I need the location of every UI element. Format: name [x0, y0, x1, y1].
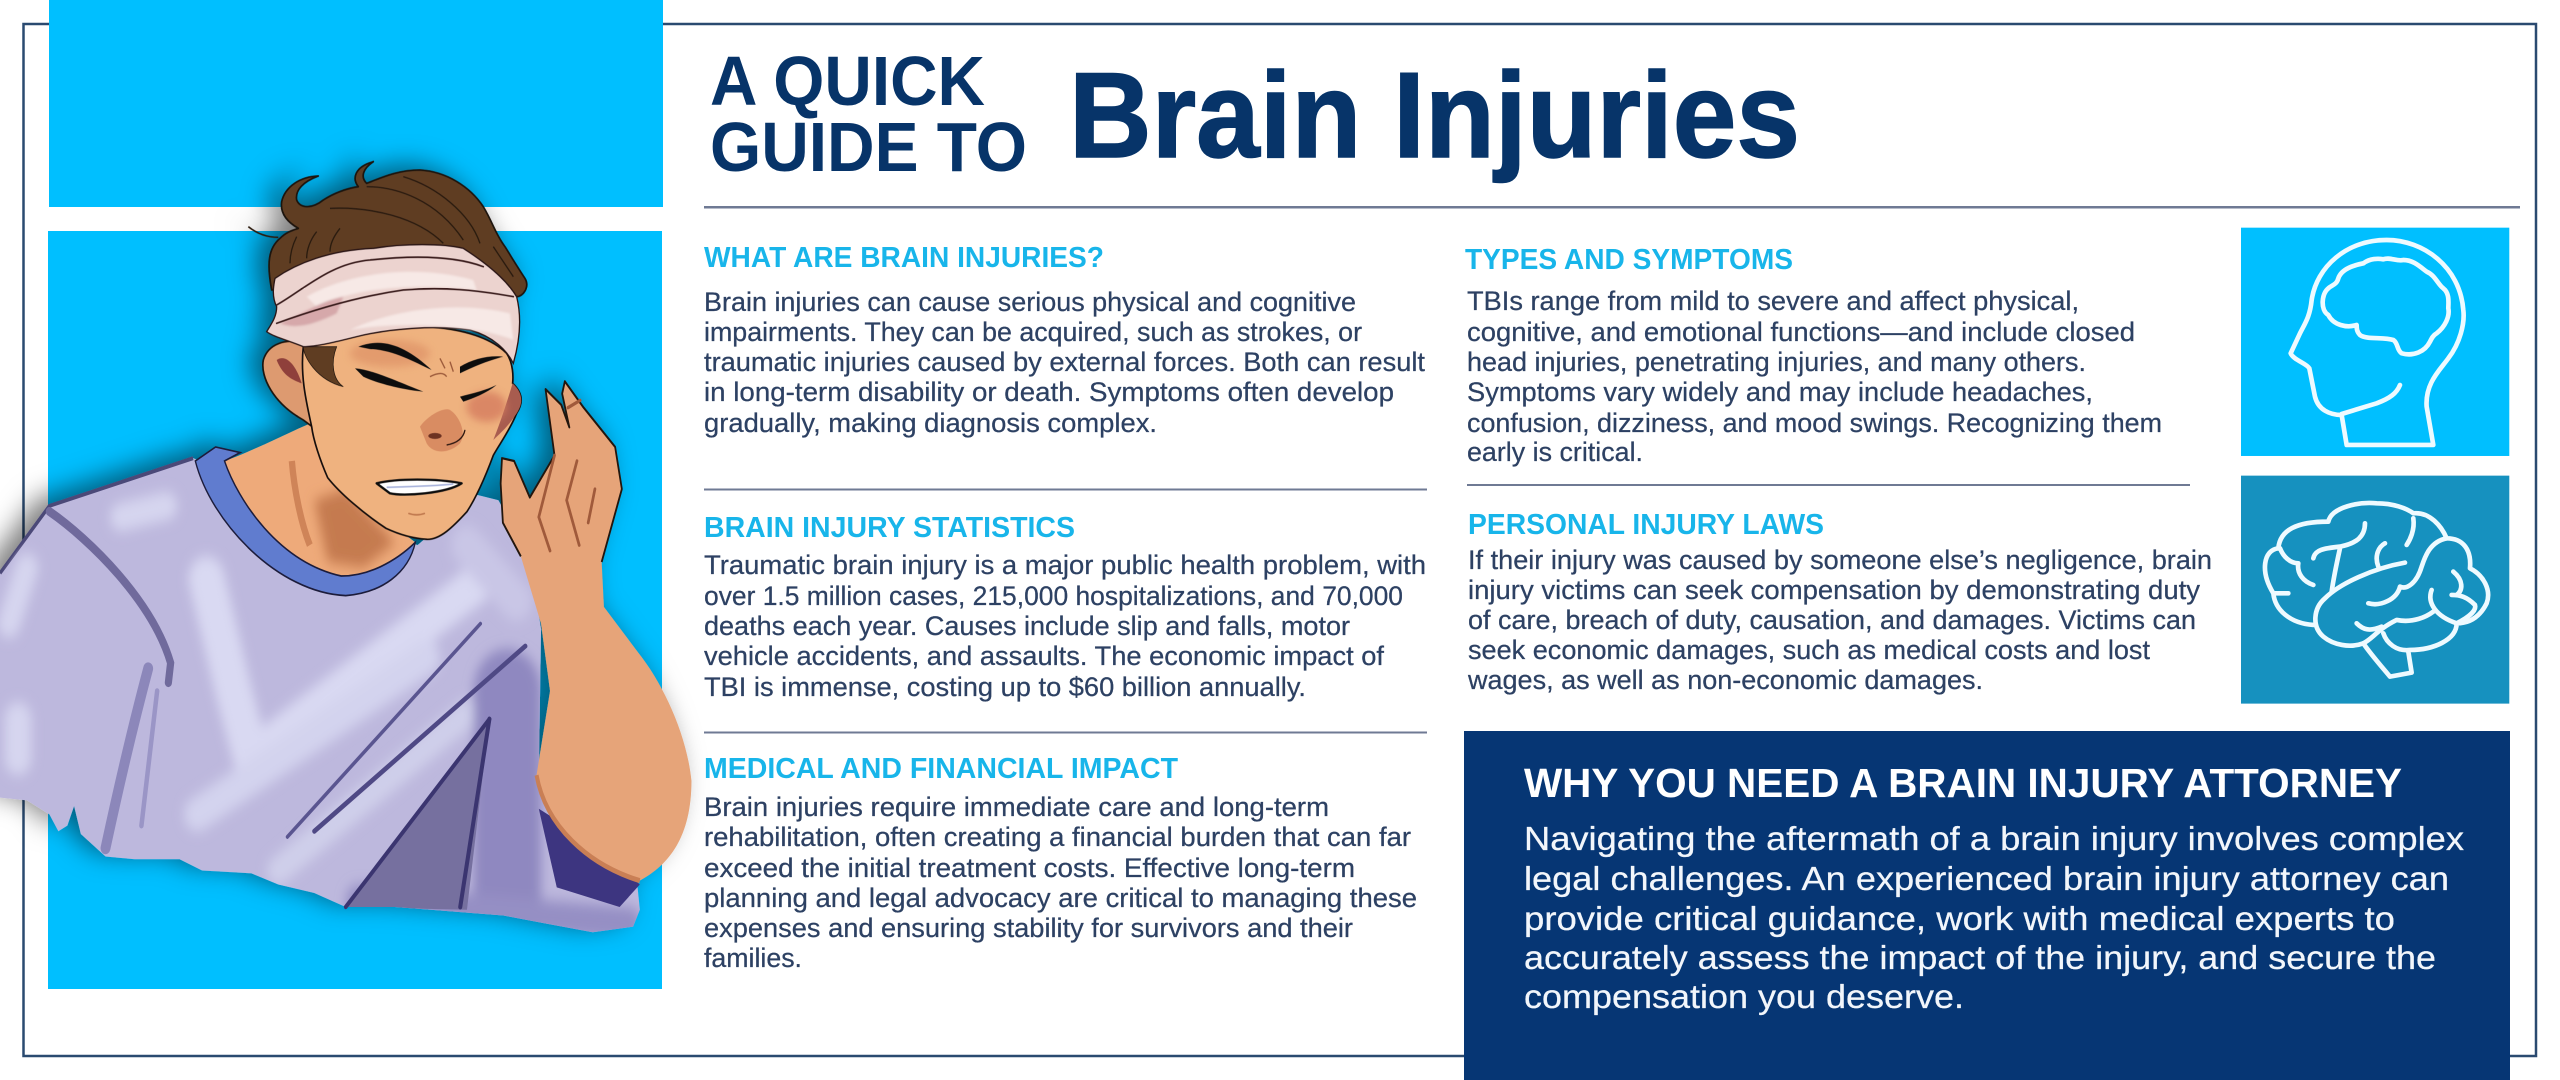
callout: why you need a brain injury attorney: provide critical guidance, work with medical experts to [1524, 901, 2395, 938]
section: personal injury laws: injury victims can seek compensation by demonstrating duty [1468, 575, 2201, 605]
icon: brain [2241, 476, 2509, 704]
bandage [267, 245, 520, 363]
callout: why you need a brain injury attorney: legal challenges. An experienced brain injury attorney can [1524, 861, 2449, 898]
ear [263, 341, 330, 430]
section: brain injury statistics: BRAIN INJURY STATISTICS [704, 512, 1075, 544]
illustration: injured man with head bandage [0, 162, 691, 932]
section: medical and financial impact: families. [704, 943, 802, 973]
section: types and symptoms: TBIs range from mild to severe and affect physical, [1467, 286, 2079, 316]
section: personal injury laws: of care, breach of duty, causation, and damages. Victims can [1468, 605, 2196, 635]
section: brain injury statistics: TBI is immense, costing up to $60 billion annually. [704, 672, 1306, 702]
section: what are brain injuries: WHAT ARE BRAIN INJURIES? [704, 242, 1104, 274]
title: brain injuries: Brain Injuries [1069, 47, 1800, 183]
lower blue panel [48, 231, 662, 989]
section: personal injury laws: If their injury was caused by someone else’s negligence, brain [1468, 545, 2212, 575]
section: types and symptoms: cognitive, and emotional functions—and include closed [1467, 317, 2135, 347]
man's shirt and arm [0, 381, 691, 932]
title: a quick guide to: GUIDE TO [710, 108, 1027, 186]
callout: why you need a brain injury attorney [1464, 731, 2510, 1080]
section: medical and financial impact [704, 753, 1417, 973]
callout: why you need a brain injury attorney: Navigating the aftermath of a brain injury involves complex [1524, 821, 2464, 858]
section: medical and financial impact: expenses and ensuring stability for survivors and their [704, 913, 1353, 943]
section: types and symptoms: early is critical. [1467, 437, 1643, 467]
callout: why you need a brain injury attorney: compensation you deserve. [1524, 979, 1964, 1016]
section: medical and financial impact: rehabilitation, often creating a financial burden that can far [704, 822, 1411, 852]
section: personal injury laws: PERSONAL INJURY LAWS [1468, 509, 1824, 541]
callout: why you need a brain injury attorney: accurately assess the impact of the injury, and secure the [1524, 940, 2436, 977]
arm and hand [539, 809, 640, 907]
section: medical and financial impact: planning and legal advocacy are critical to managing these [704, 883, 1417, 913]
title: a quick guide to [710, 42, 1027, 186]
icon: head with brain [2241, 228, 2509, 456]
face features [355, 343, 503, 402]
neck [224, 422, 415, 576]
section: what are brain injuries: Brain injuries can cause serious physical and cognitive [704, 287, 1356, 317]
section: brain injury statistics: vehicle accidents, and assaults. The economic impact of [704, 641, 1385, 671]
section: medical and financial impact: Brain injuries require immediate care and long-term [704, 792, 1329, 822]
section: types and symptoms: Symptoms vary widely and may include headaches, [1467, 377, 2093, 407]
section: brain injury statistics: over 1.5 million cases, 215,000 hospitalizations, and 70,000 [704, 581, 1403, 611]
face [302, 327, 521, 539]
title: a quick guide to: A QUICK [710, 42, 985, 120]
section: what are brain injuries: in long-term disability or death. Symptoms often develop [704, 377, 1394, 407]
section: medical and financial impact: exceed the initial treatment costs. Effective long-term [704, 853, 1355, 883]
section: types and symptoms: TYPES AND SYMPTOMS [1465, 244, 1793, 276]
section: what are brain injuries: gradually, making diagnosis complex. [704, 408, 1157, 438]
shirt collar [195, 447, 415, 596]
section: personal injury laws [1467, 509, 2212, 695]
section: what are brain injuries: impairments. They can be acquired, such as strokes, or [704, 317, 1362, 347]
section: medical and financial impact: MEDICAL AND FINANCIAL IMPACT [704, 753, 1178, 785]
section: types and symptoms: head injuries, penetrating injuries, and many others. [1467, 347, 2086, 377]
section: types and symptoms: confusion, dizziness, and mood swings. Recognizing them [1467, 408, 2162, 438]
top blue panel [49, 0, 663, 207]
section: brain injury statistics [704, 512, 1426, 702]
man's head [248, 162, 527, 539]
section: brain injury statistics: Traumatic brain injury is a major public health problem, with [704, 550, 1426, 580]
section: what are brain injuries [704, 242, 1426, 438]
hair [269, 162, 527, 297]
section: types and symptoms [1465, 244, 2162, 467]
section: personal injury laws: wages, as well as non-economic damages. [1467, 665, 1983, 695]
callout: why you need a brain injury attorney: WHY YOU NEED A BRAIN INJURY ATTORNEY [1524, 760, 2402, 806]
section: personal injury laws: seek economic damages, such as medical costs and lost [1468, 635, 2151, 665]
section: brain injury statistics: deaths each year. Causes include slip and falls, motor [704, 611, 1350, 641]
section: what are brain injuries: traumatic injuries caused by external forces. Both can result [704, 347, 1426, 377]
